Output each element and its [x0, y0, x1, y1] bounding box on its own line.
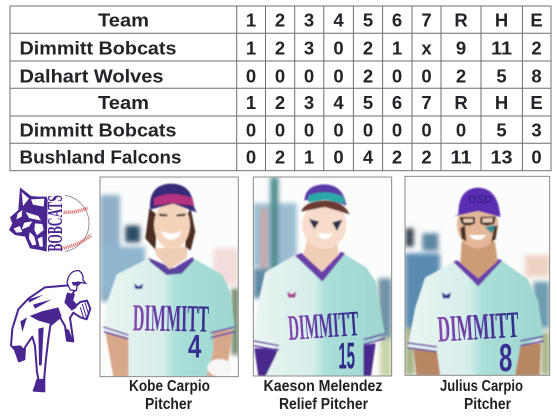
row: Dimmitt Bobcats game 2: Dimmitt Bobcats	[20, 120, 176, 141]
header row: game 2	[98, 92, 543, 113]
row: Bushland Falcons: 0	[246, 146, 256, 167]
row: Dimmitt Bobcats game 2: 5	[496, 120, 507, 141]
row: Dimmitt Bobcats game 1: 2	[531, 37, 542, 58]
header row: game 2: 3	[304, 92, 314, 113]
row: Dimmitt Bobcats game 2: 0	[363, 120, 373, 141]
header row: game 2: E	[530, 92, 543, 113]
row: Dimmitt Bobcats game 1: 2	[275, 37, 285, 58]
header row: game 1	[98, 10, 543, 31]
row: Dimmitt Bobcats game 2: 0	[333, 120, 344, 141]
row: Dimmitt Bobcats game 2: 0	[304, 120, 314, 141]
header row: game 1: E	[530, 10, 543, 31]
row: Dimmitt Bobcats game 1: x	[421, 37, 432, 58]
header row: game 1: H	[495, 10, 508, 31]
header row: game 2: Team	[98, 92, 149, 113]
row: Dimmitt Bobcats game 2: 0	[392, 120, 402, 141]
row: Dalhart Wolves: 0	[392, 65, 402, 86]
header row: game 1: 2	[275, 10, 285, 31]
panel: Kobe Carpio photo	[100, 177, 238, 377]
panel: Kobe Carpio photo: 4	[188, 328, 201, 365]
row: Dimmitt Bobcats game 2	[20, 120, 542, 141]
caption: Kaeson Melendez	[264, 378, 383, 413]
row: Dalhart Wolves: 0	[304, 65, 314, 86]
header row: game 2: 6	[392, 92, 402, 113]
row: Dimmitt Bobcats game 2: 0	[246, 120, 256, 141]
panel: Julius Carpio photo	[405, 176, 550, 380]
row: Dimmitt Bobcats game 1: 0	[333, 37, 344, 58]
row: Bushland Falcons: 13	[490, 146, 512, 167]
row: Dalhart Wolves: 0	[275, 65, 285, 86]
panel: Kaeson Melendez photo: DIMMITT	[287, 303, 360, 348]
caption: Kobe Carpio: Kobe Carpio	[129, 378, 210, 395]
caption: Kobe Carpio	[129, 378, 210, 413]
row: Dalhart Wolves: 0	[333, 65, 344, 86]
header row: game 1: 4	[333, 10, 344, 31]
header row: game 1: 7	[421, 10, 432, 31]
row: Dimmitt Bobcats game 2: 0	[275, 120, 285, 141]
header row: game 2: H	[495, 92, 508, 113]
header row: game 2: 1	[246, 92, 256, 113]
row: Bushland Falcons: 4	[363, 146, 374, 167]
row: Dimmitt Bobcats game 1: 1	[246, 37, 256, 58]
scoreboard table	[10, 6, 551, 171]
header row: game 1: 3	[304, 10, 314, 31]
header row: game 1: R	[454, 10, 468, 31]
row: Dalhart Wolves: 2	[363, 65, 373, 86]
header row: game 2: 7	[421, 92, 432, 113]
caption: Kobe Carpio: Pitcher	[145, 396, 192, 413]
row: Dimmitt Bobcats game 2: 0	[421, 120, 432, 141]
row: Dimmitt Bobcats game 1: 1	[392, 37, 402, 58]
header row: game 2: R	[454, 92, 468, 113]
icon: Bobcats logo with baseball: BOBCATS	[45, 195, 67, 252]
row: Dimmitt Bobcats game 1: 3	[304, 37, 314, 58]
panel: Kaeson Melendez photo	[253, 177, 392, 377]
header row: game 1: 6	[392, 10, 402, 31]
row: Bushland Falcons: 2	[421, 146, 432, 167]
icon: Bobcats logo with baseball	[9, 187, 91, 252]
row: Bushland Falcons: 0	[531, 146, 542, 167]
row: Dimmitt Bobcats game 1	[20, 37, 542, 58]
row: Dalhart Wolves: 8	[531, 65, 542, 86]
panel: Kobe Carpio photo: DIMMITT	[132, 297, 209, 341]
row: Dimmitt Bobcats game 1: 2	[363, 37, 373, 58]
header row: game 1: Team	[98, 10, 149, 31]
header row: game 1: 5	[363, 10, 373, 31]
row: Dimmitt Bobcats game 1: 9	[456, 37, 466, 58]
caption: Julius Carpio	[440, 378, 523, 413]
row: Dalhart Wolves: 0	[246, 65, 256, 86]
header row: game 1: 1	[246, 10, 256, 31]
panel: Julius Carpio photo: DSD	[468, 194, 492, 206]
panel: Kaeson Melendez photo: 15	[338, 334, 355, 376]
row: Bushland Falcons: 0	[333, 146, 344, 167]
row: Bushland Falcons: 11	[450, 146, 472, 167]
row: Dimmitt Bobcats game 2: 3	[531, 120, 542, 141]
row: Dalhart Wolves: 5	[496, 65, 507, 86]
header row: game 2: 2	[275, 92, 285, 113]
row: Dimmitt Bobcats game 1: 11	[491, 37, 512, 58]
row: Dalhart Wolves	[20, 65, 542, 86]
row: Dalhart Wolves: 2	[456, 65, 466, 86]
header row: game 2: 4	[333, 92, 344, 113]
panel: Julius Carpio photo: 8	[499, 336, 512, 380]
row: Dimmitt Bobcats game 2: 0	[456, 120, 466, 141]
caption: Kaeson Melendez: Relief Pitcher	[279, 396, 368, 413]
caption: Julius Carpio: Julius Carpio	[440, 378, 523, 395]
row: Dalhart Wolves: Dalhart Wolves	[20, 65, 164, 86]
icon: pitcher silhouette	[11, 271, 90, 391]
caption: Kaeson Melendez: Kaeson Melendez	[264, 378, 383, 395]
row: Bushland Falcons: 1	[304, 146, 314, 167]
header row: game 2: 5	[363, 92, 373, 113]
row: Bushland Falcons: Bushland Falcons	[20, 146, 182, 167]
row: Bushland Falcons: 2	[392, 146, 402, 167]
row: Bushland Falcons: 2	[275, 146, 285, 167]
row: Bushland Falcons	[20, 146, 542, 167]
caption: Julius Carpio: Pitcher	[464, 396, 511, 413]
row: Dimmitt Bobcats game 1: Dimmitt Bobcats	[20, 37, 176, 58]
row: Dalhart Wolves: 0	[421, 65, 432, 86]
